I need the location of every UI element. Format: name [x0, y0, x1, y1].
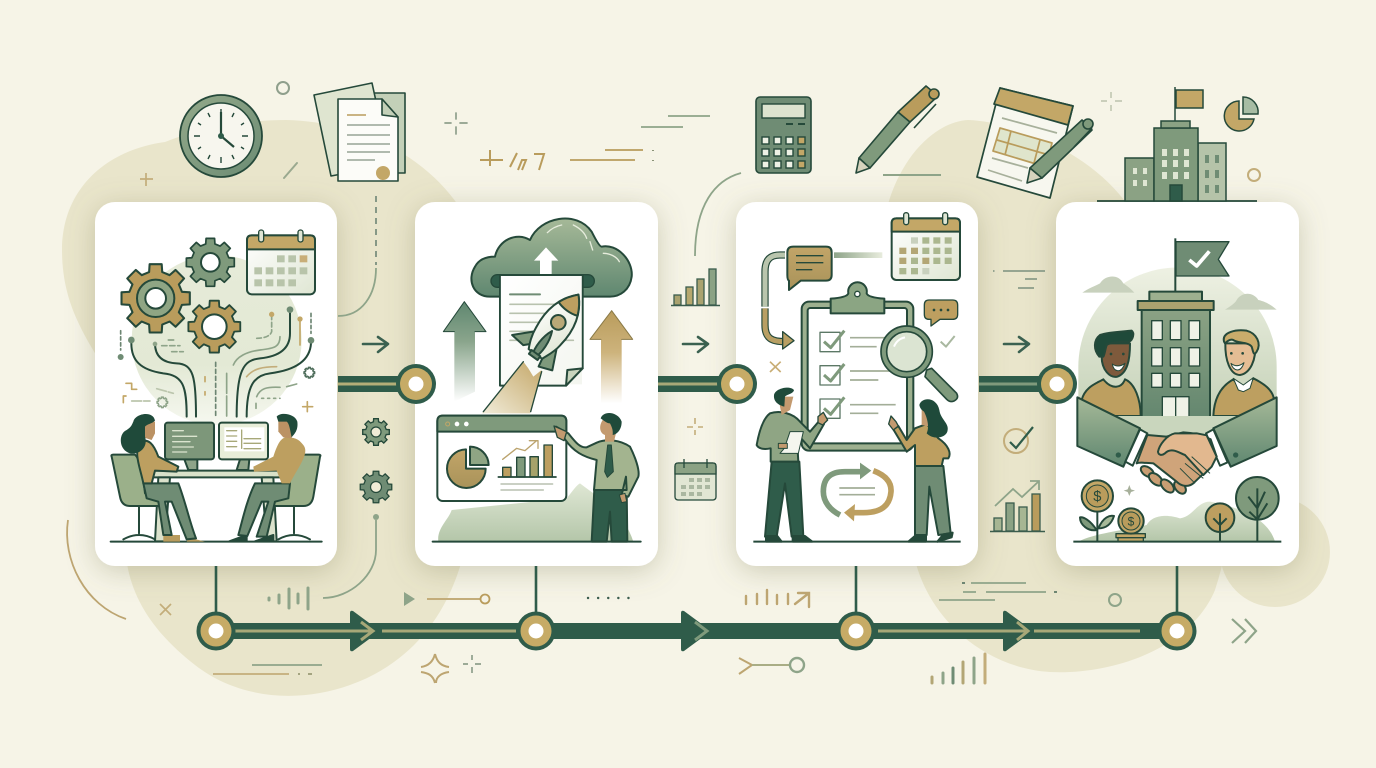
icon: rocket — [506, 277, 597, 374]
small marks — [941, 336, 955, 347]
arrow: step 3 to 4 — [1004, 337, 1029, 352]
dashboard window — [437, 416, 566, 501]
circuit lines — [131, 312, 311, 417]
person: right partner — [1213, 330, 1274, 416]
arrow: step 2 to 3 — [683, 337, 708, 352]
curve to bars — [323, 514, 379, 598]
icon: coin stack: $ — [1128, 514, 1135, 528]
icon: gears between panels — [360, 419, 392, 503]
icon: coin stack — [1116, 508, 1145, 542]
lower decor: sparkle gold — [421, 654, 449, 683]
dash lines: between panels 3 and 4 — [993, 271, 1045, 288]
icon: second pen — [1027, 119, 1093, 183]
panel: launch and growth — [415, 202, 658, 566]
background blob: left — [62, 120, 484, 696]
upper connector: curve two — [695, 173, 741, 256]
halo — [1078, 267, 1277, 420]
table and monitors — [152, 423, 280, 541]
icon: notepad — [977, 88, 1073, 198]
sparkle: top centre — [445, 113, 467, 134]
icon: upload arrow — [534, 247, 558, 275]
green dash lines — [641, 116, 710, 127]
handshake — [1077, 397, 1277, 496]
icon: calculator — [756, 97, 811, 173]
icon: documents — [314, 83, 405, 181]
person: woman pointing — [889, 399, 953, 542]
icon: check circle — [1004, 427, 1033, 453]
loop arrow — [834, 252, 882, 258]
hill — [1078, 502, 1275, 542]
line below pen — [883, 174, 941, 176]
speech bubble: large — [787, 247, 832, 290]
timeline: main bar with arrows and nodes — [196, 566, 1196, 651]
panel: partnership — [1056, 202, 1299, 566]
ground line — [1073, 539, 1281, 545]
ground line — [111, 539, 322, 545]
node: upper 3 — [1037, 364, 1077, 404]
upper connector: dashed curve — [375, 196, 377, 265]
lower decor: arrow with ring — [739, 658, 804, 674]
lower decor: small bars — [269, 588, 308, 609]
halo — [132, 255, 302, 425]
background blob: right — [879, 120, 1235, 672]
icon: calendar — [892, 213, 960, 280]
icon: building — [1138, 292, 1214, 418]
icon: pie chart — [1224, 97, 1258, 131]
gold marks — [480, 150, 653, 170]
person: man with notepad — [757, 388, 828, 542]
icon: small ring top — [277, 82, 289, 94]
icon: growth arrows — [443, 302, 486, 402]
icon: trees — [1206, 477, 1279, 542]
person: presenter — [554, 413, 639, 542]
ground line — [433, 539, 641, 545]
icon: clipboard — [802, 282, 913, 451]
icon: skyline — [1097, 87, 1257, 201]
lower decor: chevrons — [1232, 619, 1256, 643]
node: upper 1 — [396, 364, 436, 404]
lower decor: cross — [160, 604, 171, 615]
person: man — [229, 414, 320, 541]
icon: gears — [122, 238, 240, 353]
ground line — [753, 539, 961, 545]
icon: coin plant — [1080, 480, 1114, 542]
panel: review and compliance — [736, 202, 978, 566]
sparkle: top right — [1101, 92, 1122, 111]
speech bubble: small — [924, 300, 958, 326]
lower decor: right dash lines — [939, 583, 1057, 600]
lower decor: play line — [404, 592, 490, 606]
icon: flag — [1175, 238, 1229, 292]
icon: growth chart — [990, 481, 1045, 532]
node: upper 2 — [717, 364, 757, 404]
document — [500, 275, 583, 386]
icon: clock — [180, 95, 262, 177]
icon: magnifier — [881, 326, 958, 402]
lower decor: sparkle grey — [463, 655, 481, 673]
arrow: step 1 to 2 — [363, 337, 388, 352]
sparkle: between panels 2 and 3 — [687, 418, 703, 435]
lower decor: left swoosh — [67, 520, 126, 619]
lower decor: dots — [588, 597, 629, 599]
icon: small calendar — [675, 459, 716, 500]
icon: slot — [491, 275, 594, 287]
icon: pen — [856, 86, 939, 173]
background blob: small right circle — [1220, 497, 1330, 607]
connector bars between panels — [338, 376, 1049, 392]
icon: cycle arrows — [823, 471, 891, 515]
lower decor: left lines — [213, 665, 322, 674]
icon: coin plant: $ — [1093, 489, 1101, 505]
lower decor: ring — [1109, 594, 1121, 606]
icon: calendar — [247, 230, 315, 294]
icon: cloud — [471, 218, 632, 297]
person: left partner — [1082, 331, 1141, 416]
sparkle — [1124, 485, 1135, 496]
ring: right — [1248, 169, 1260, 181]
person: woman — [111, 414, 205, 542]
lower decor: gold bars and arrow — [746, 590, 809, 607]
panel: research and planning — [95, 202, 337, 566]
flame — [482, 362, 542, 413]
plus mark: left — [140, 173, 153, 186]
lower decor: rising bars — [932, 654, 985, 683]
icon: bar chart between panels 2 and 3 — [671, 269, 720, 306]
hills — [438, 483, 633, 542]
clouds — [1082, 276, 1134, 293]
icon: slash mark — [284, 163, 297, 178]
checklist — [820, 331, 896, 418]
